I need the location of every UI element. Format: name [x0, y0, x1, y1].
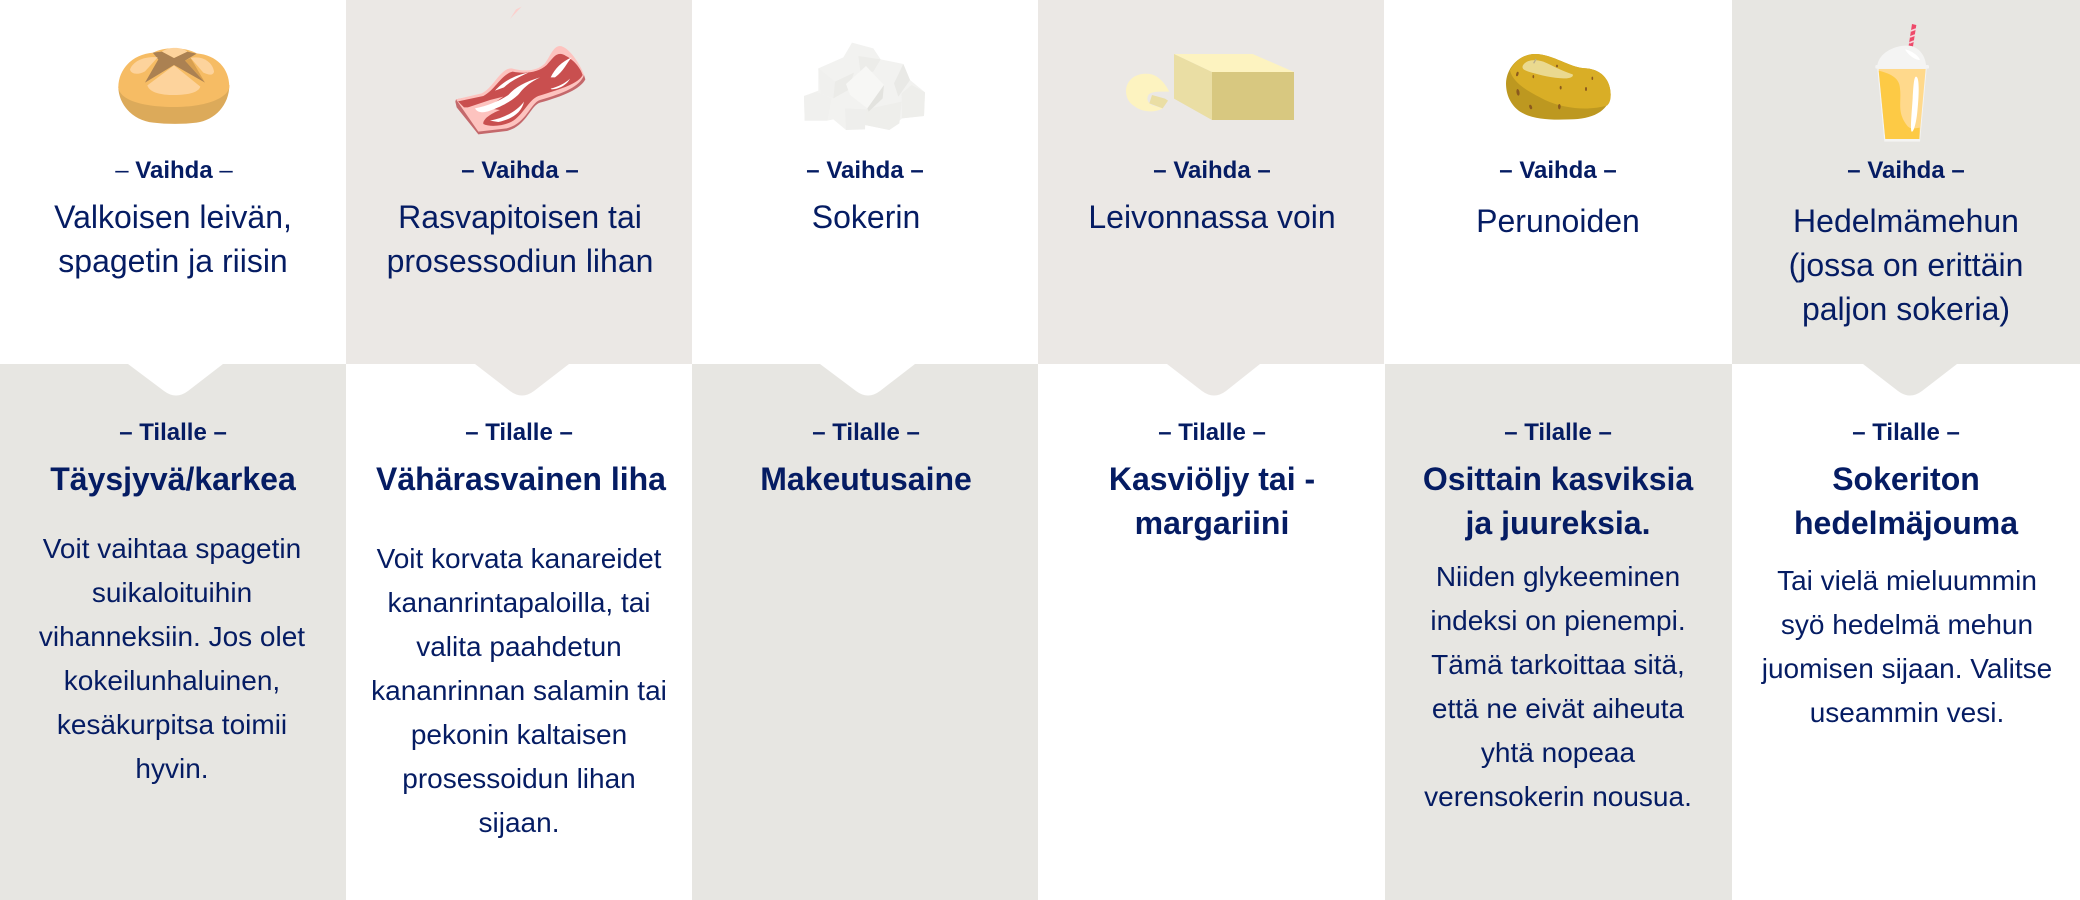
description: Niiden glykeeminen — [1436, 561, 1680, 592]
description: kananrintapaloilla, tai — [387, 587, 651, 618]
replacement label: – Tilalle – — [812, 419, 920, 446]
replacement title: hedelmäjouma — [1794, 505, 2018, 541]
panel: column 1 swap from: spagetin ja riisin — [58, 243, 288, 279]
replacement label: – Tilalle – — [1852, 419, 1960, 446]
replacement title: Makeutusaine — [760, 461, 972, 497]
panel: column 6 swap from: (jossa on erittäin — [1789, 247, 2023, 283]
panel: column 6 swap from — [1732, 0, 2080, 364]
panel: column 2 swap from: prosessodiun lihan — [387, 243, 653, 279]
pointer notch — [1863, 364, 1957, 396]
description: pekonin kaltaisen — [411, 719, 627, 750]
icon: bread roll — [118, 48, 229, 124]
food name: Sokerin — [812, 199, 920, 235]
replacement title: Vähärasvainen liha — [376, 461, 666, 497]
description: indeksi on pienempi. — [1430, 605, 1686, 636]
replacement title: Täysjyvä/karkea — [50, 461, 296, 497]
panel: column 1 swap from — [0, 0, 346, 364]
replacement title: Sokeriton — [1832, 461, 1980, 497]
description: verensokerin nousua. — [1424, 781, 1692, 812]
description: Tämä tarkoittaa sitä, — [1431, 649, 1685, 680]
replacement title: Osittain kasviksia — [1423, 461, 1693, 497]
replacement title: ja juureksia. — [1465, 505, 1650, 541]
panel: column 3 swap from — [692, 0, 1038, 364]
description: Tai vielä mieluummin — [1777, 565, 2037, 596]
icon: butter — [1126, 54, 1294, 120]
pointer notch — [128, 364, 223, 396]
description: kokeilunhaluinen, — [64, 665, 280, 696]
panel: column 1 replacement — [0, 364, 346, 900]
description: Voit vaihtaa spagetin — [43, 533, 301, 564]
panel: column 3 replacement — [692, 364, 1038, 900]
swap label: – Vaihda – — [1499, 157, 1617, 184]
description: suikaloituihin — [92, 577, 252, 608]
panel: column 2 replacement — [346, 364, 692, 900]
description: prosessoidun lihan — [402, 763, 636, 794]
pointer notch — [820, 364, 915, 396]
icon: juice cup — [1875, 24, 1929, 142]
swap label: – Vaihda – — [1847, 157, 1965, 184]
panel: column 6 replacement — [1732, 364, 2080, 900]
description: useammin vesi. — [1810, 697, 2004, 728]
food name: Leivonnassa voin — [1088, 199, 1336, 235]
description: syö hedelmä mehun — [1781, 609, 2033, 640]
panel: column 6 swap from: paljon sokeria) — [1802, 291, 2010, 327]
panel: column 2 swap from — [346, 0, 692, 364]
replacement label: – Tilalle – — [119, 419, 227, 446]
replacement title: margariini — [1135, 505, 1289, 541]
description: hyvin. — [135, 753, 209, 784]
food name: Perunoiden — [1476, 203, 1640, 239]
food name: Valkoisen leivän, — [54, 199, 292, 235]
food name: Hedelmämehun — [1793, 203, 2019, 239]
description: että ne eivät aiheuta — [1432, 693, 1685, 724]
swap label: – Vaihda – — [115, 157, 233, 184]
panel: column 4 swap from — [1038, 0, 1384, 364]
replacement title: Kasviöljy tai - — [1109, 461, 1315, 497]
description: Voit korvata kanareidet — [377, 543, 662, 574]
description: valita paahdetun — [416, 631, 622, 662]
description: kesäkurpitsa toimii — [57, 709, 287, 740]
swap label: – Vaihda – — [806, 157, 924, 184]
pointer notch — [475, 364, 569, 396]
description: sijaan. — [479, 807, 559, 838]
swap label: – Vaihda – — [461, 157, 579, 184]
replacement label: – Tilalle – — [465, 419, 573, 446]
description: kananrinnan salamin tai — [371, 675, 667, 706]
food name: Rasvapitoisen tai — [398, 199, 642, 235]
description: juomisen sijaan. Valitse — [1761, 653, 2052, 684]
icon: potato — [1506, 54, 1611, 120]
pointer notch — [1167, 364, 1260, 396]
panel: column 4 replacement — [1038, 364, 1385, 900]
description: yhtä nopeaa — [1481, 737, 1635, 768]
description: vihanneksiin. Jos olet — [39, 621, 305, 652]
icon: bacon — [455, 7, 585, 134]
panel: column 5 replacement — [1385, 364, 1732, 900]
replacement label: – Tilalle – — [1504, 419, 1612, 446]
swap label: – Vaihda – — [1153, 157, 1271, 184]
icon: sugar cubes — [804, 43, 925, 130]
panel: column 5 swap from — [1384, 0, 1732, 364]
replacement label: – Tilalle – — [1158, 419, 1266, 446]
